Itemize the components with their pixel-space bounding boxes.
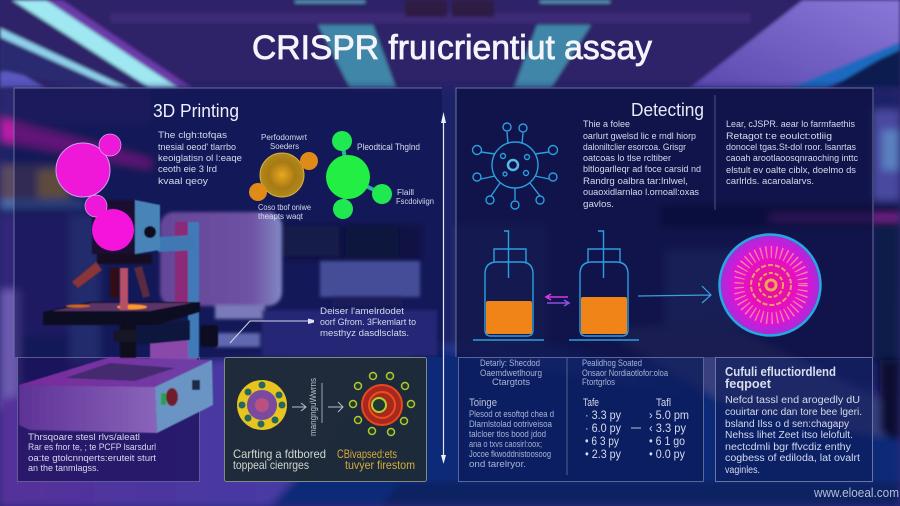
- text block: detecting column two: elstult ev oalte ciblx, doelmo ds: [726, 165, 857, 175]
- table heading: left: Ctargtots: [492, 377, 531, 387]
- divider between detecting columns: [714, 95, 716, 210]
- data table: times: · 3.3 py: [585, 408, 621, 422]
- magenta molecule cluster: [56, 134, 134, 251]
- text block: printing note: an the tanmlagss.: [28, 463, 99, 473]
- gold molecule with labels: [249, 133, 318, 221]
- icon: left assay bottle: [473, 231, 544, 340]
- text block: 3D printing intro: [158, 130, 242, 186]
- panel: detecting: [456, 88, 874, 357]
- icon: red cell with satellites: [350, 372, 414, 436]
- gold molecule with labels: Perfodomwrt: [261, 133, 308, 142]
- text block: table notes: Dlarnlstolad ootriveisoa: [469, 419, 552, 429]
- text block: detecting column one: daloniltclier esorcoa. Grisgr: [583, 142, 686, 152]
- box body text: cogbess of ediloda, lat ovalrt: [725, 453, 860, 464]
- text block: table notes: [469, 397, 554, 469]
- text block: table notes: Plesod ot esoftqd chea d: [469, 409, 554, 419]
- text block: printing note: oa:te gtolcnnqerts:eruteit sturt: [28, 453, 157, 463]
- green molecule with labels: [326, 131, 434, 219]
- data table: times: Tafl: [656, 397, 671, 409]
- box heading: [725, 364, 836, 391]
- data table: times: • 6 1 go: [649, 434, 685, 448]
- table heading: right: Onsaor Nordiaotlofor:oloa: [582, 368, 668, 378]
- caption: left: Carfting a fdtbored: [233, 447, 326, 461]
- data table: times: · 6.0 py: [585, 421, 621, 435]
- text block: detecting column two: donocel tgas.St-dol roor. lsanrtas: [726, 142, 856, 152]
- caption: left: [233, 447, 326, 472]
- panel: 3D printing: [14, 88, 442, 357]
- text block: 3D printing intro: The clgh:tofqas: [158, 130, 228, 140]
- box body text: nectcdmli bgr ffvcdiz enthy: [725, 442, 851, 453]
- icon: blue viral network: [472, 123, 558, 209]
- text block: printing note: [28, 432, 157, 473]
- data table: times: [583, 397, 689, 461]
- text block: detecting column one: bltlogarlleqr ad foce carsid nd: [583, 164, 701, 174]
- text block: detecting column one: [583, 119, 701, 209]
- green molecule with labels: Flaill: [397, 188, 414, 197]
- arrow: conversion step one: [292, 403, 306, 411]
- text block: detecting column one: Thie a folee: [583, 119, 630, 129]
- data table: times: Tafe: [583, 397, 599, 409]
- table heading: right: Ftortgrlos: [582, 377, 615, 387]
- arrows: magenta exchange: [546, 294, 569, 306]
- data table: times: • 6 3 py: [585, 434, 619, 448]
- caption: right: CBivapsed:ets: [337, 447, 397, 461]
- arrow: to readout dish: [638, 286, 711, 303]
- green molecule with labels: Fscdoiviign: [396, 197, 434, 206]
- data table: times: • 0.0 py: [649, 447, 685, 461]
- box body text: vaginles.: [725, 465, 760, 476]
- bracket line: [321, 383, 323, 423]
- callout with leader arrow: Deiser l'amelrdodet: [320, 306, 405, 316]
- callout with leader arrow: mesthyz dasdlsclats.: [320, 328, 409, 338]
- callout with leader arrow: oorf Gfrom. 3Fkemlart to: [320, 317, 416, 327]
- data table: times: • 2.3 py: [585, 447, 621, 461]
- text block: printing note: Rar es fnor te, ; te PCFP lsarsdurl: [28, 442, 156, 452]
- box body text: couirtar onc dan tore bee lgeri.: [725, 407, 862, 418]
- section heading: 3D Printing: 3D Printing: [153, 101, 239, 121]
- gold molecule with labels: Soeders: [270, 142, 299, 151]
- text block: detecting column two: Lear, cJSPR. aear lo farmfaethis: [726, 119, 855, 129]
- table heading: right: Pealidhog Soated: [582, 358, 642, 368]
- arrow: conversion step two: [328, 402, 343, 412]
- text block: detecting column two: Retagot t:e eoulct:otliig: [726, 131, 832, 141]
- table heading: right: [582, 358, 668, 387]
- box heading: feqpoet: [725, 376, 772, 391]
- text block: detecting column two: caoah arootlaoosqnraoching inttc: [726, 153, 858, 163]
- box body text: [725, 395, 862, 476]
- text block: detecting column one: gavlos.: [583, 199, 614, 209]
- text block: printing note: Thrsqoare stesl rlvs/aleatl: [28, 432, 140, 442]
- title: CRISPR fruıcrientiut assay: [252, 29, 652, 67]
- double-headed vertical arrow: [441, 112, 446, 464]
- text block: table notes: Toinge: [469, 397, 497, 409]
- text block: detecting column two: [726, 119, 858, 186]
- text block: table notes: ond tarelryor.: [469, 459, 526, 469]
- box body text: Nefcd tassl end arogedly dU: [725, 395, 860, 406]
- text block: table notes: ana o txvs caosirl:oox;: [469, 439, 542, 449]
- caption: right: tuvyer firestom: [345, 458, 415, 472]
- data table: times: › 5.0 pm: [649, 408, 689, 422]
- section heading: Detecting: Detecting: [631, 100, 704, 120]
- caption: left: toppeal cienrges: [233, 458, 309, 472]
- text block: table notes: Jocoe fkwoddnistoosoog: [469, 449, 551, 459]
- caption: right: [337, 447, 415, 472]
- text block: 3D printing intro: kvaal qeoy: [158, 176, 209, 186]
- text block: detecting column one: Randrg oalbra tar:lnlwel,: [583, 176, 688, 186]
- box body text: Nehss lihet Zeet itso lelofult.: [725, 430, 853, 441]
- text block: detecting column two: carlrlds. acaroalarvs.: [726, 176, 814, 186]
- icon: right assay bottle: [569, 231, 639, 340]
- box: critical fraction support: [716, 358, 872, 482]
- box body text: bsland Ilss o d sen:chagapy: [725, 419, 849, 430]
- icon: yellow cell: [237, 380, 287, 430]
- text block: detecting column one: oatcoas lo tlse rcltiber: [583, 153, 671, 163]
- box: conversion diagram: [224, 358, 426, 482]
- box: printing note: [18, 358, 200, 482]
- text block: 3D printing intro: ceoth eie 3 lrd: [158, 164, 217, 174]
- gold molecule with labels: Coso tbof oniwe: [258, 203, 312, 212]
- green molecule with labels: Pleodtical Thglnd: [357, 142, 420, 152]
- microscope illustration: [19, 200, 218, 433]
- vertical rotated label: mangnguWwrns: [308, 378, 318, 436]
- table heading: left: Detarly: Shecdod: [480, 358, 540, 368]
- gold molecule with labels: theapts waqt: [258, 212, 304, 221]
- callout with leader arrow: [230, 306, 416, 343]
- icon: fluorescent readout dish: [720, 234, 820, 336]
- data table: times: ‹ 3.3 py: [649, 421, 686, 435]
- lilac lab machine behind panel: [160, 212, 437, 356]
- text block: 3D printing intro: keoiglatisn ol l:eaqe: [158, 153, 242, 163]
- table heading: left: Oaemdwetlhourg: [480, 368, 542, 378]
- text block: detecting column one: oarlurt gwelsd lic e rndl hiorp: [583, 131, 696, 141]
- text block: 3D printing intro: tnesial oeod' tlarrbo: [158, 142, 236, 152]
- table heading: left: [480, 358, 542, 387]
- box heading: Cufuli efluctiordlend: [725, 364, 836, 379]
- box: table of detection times: [458, 358, 704, 482]
- text block: detecting column one: ouaoxidlarnlao l.ornoall:oxas: [583, 187, 700, 197]
- text block: table notes: talcloer tlos bood jdod: [469, 429, 546, 439]
